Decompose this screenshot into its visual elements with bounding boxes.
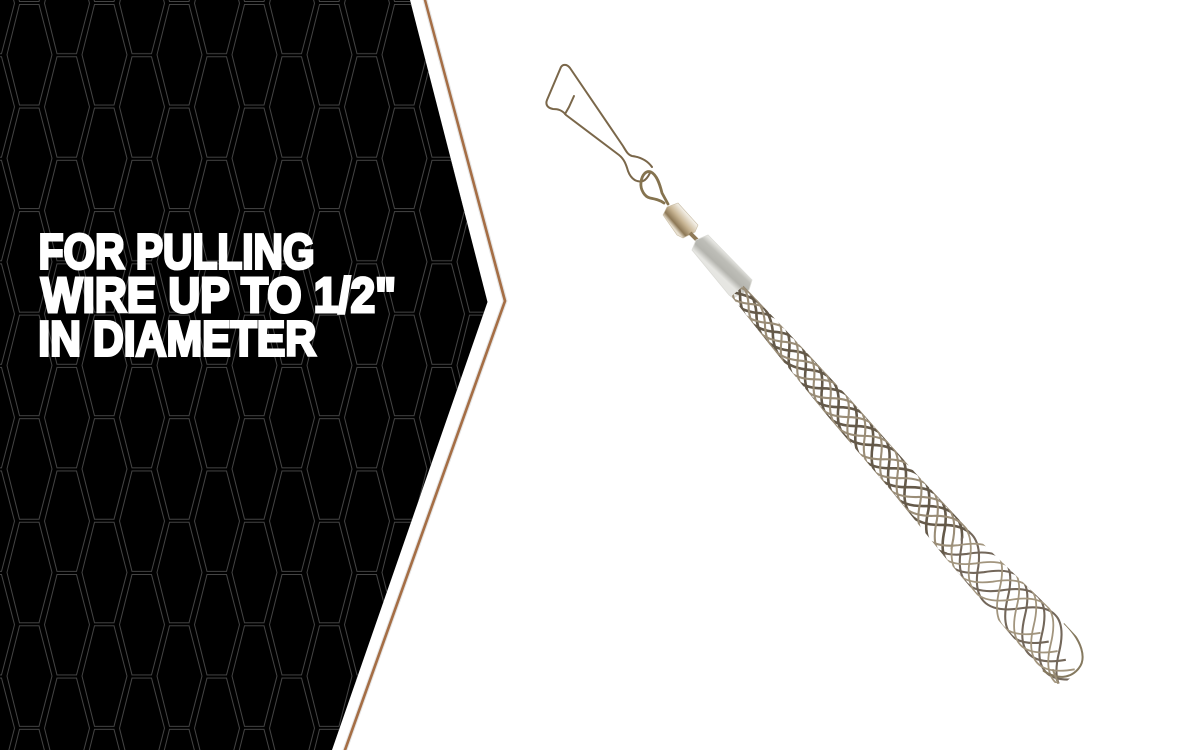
panel: black chevron with hexagon pattern	[0, 0, 488, 750]
wire mesh grip: upper section	[732, 286, 970, 556]
mesh: tip wire	[1053, 670, 1058, 683]
icon: swivel barrel	[663, 203, 698, 238]
heading: WIRE UP TO 1/2"	[41, 269, 396, 323]
product: wire pulling grip	[545, 64, 1084, 684]
wire mesh grip: lower section	[943, 530, 1084, 684]
icon: crimp sleeve	[692, 235, 752, 298]
icon: swivel eye	[641, 172, 668, 204]
heading: FOR PULLING	[39, 226, 315, 280]
icon: snap clip	[546, 65, 652, 182]
icon: swivel pin	[690, 233, 699, 242]
heading	[38, 226, 396, 366]
heading: IN DIAMETER	[38, 312, 316, 366]
brown chevron outline	[342, 0, 508, 750]
